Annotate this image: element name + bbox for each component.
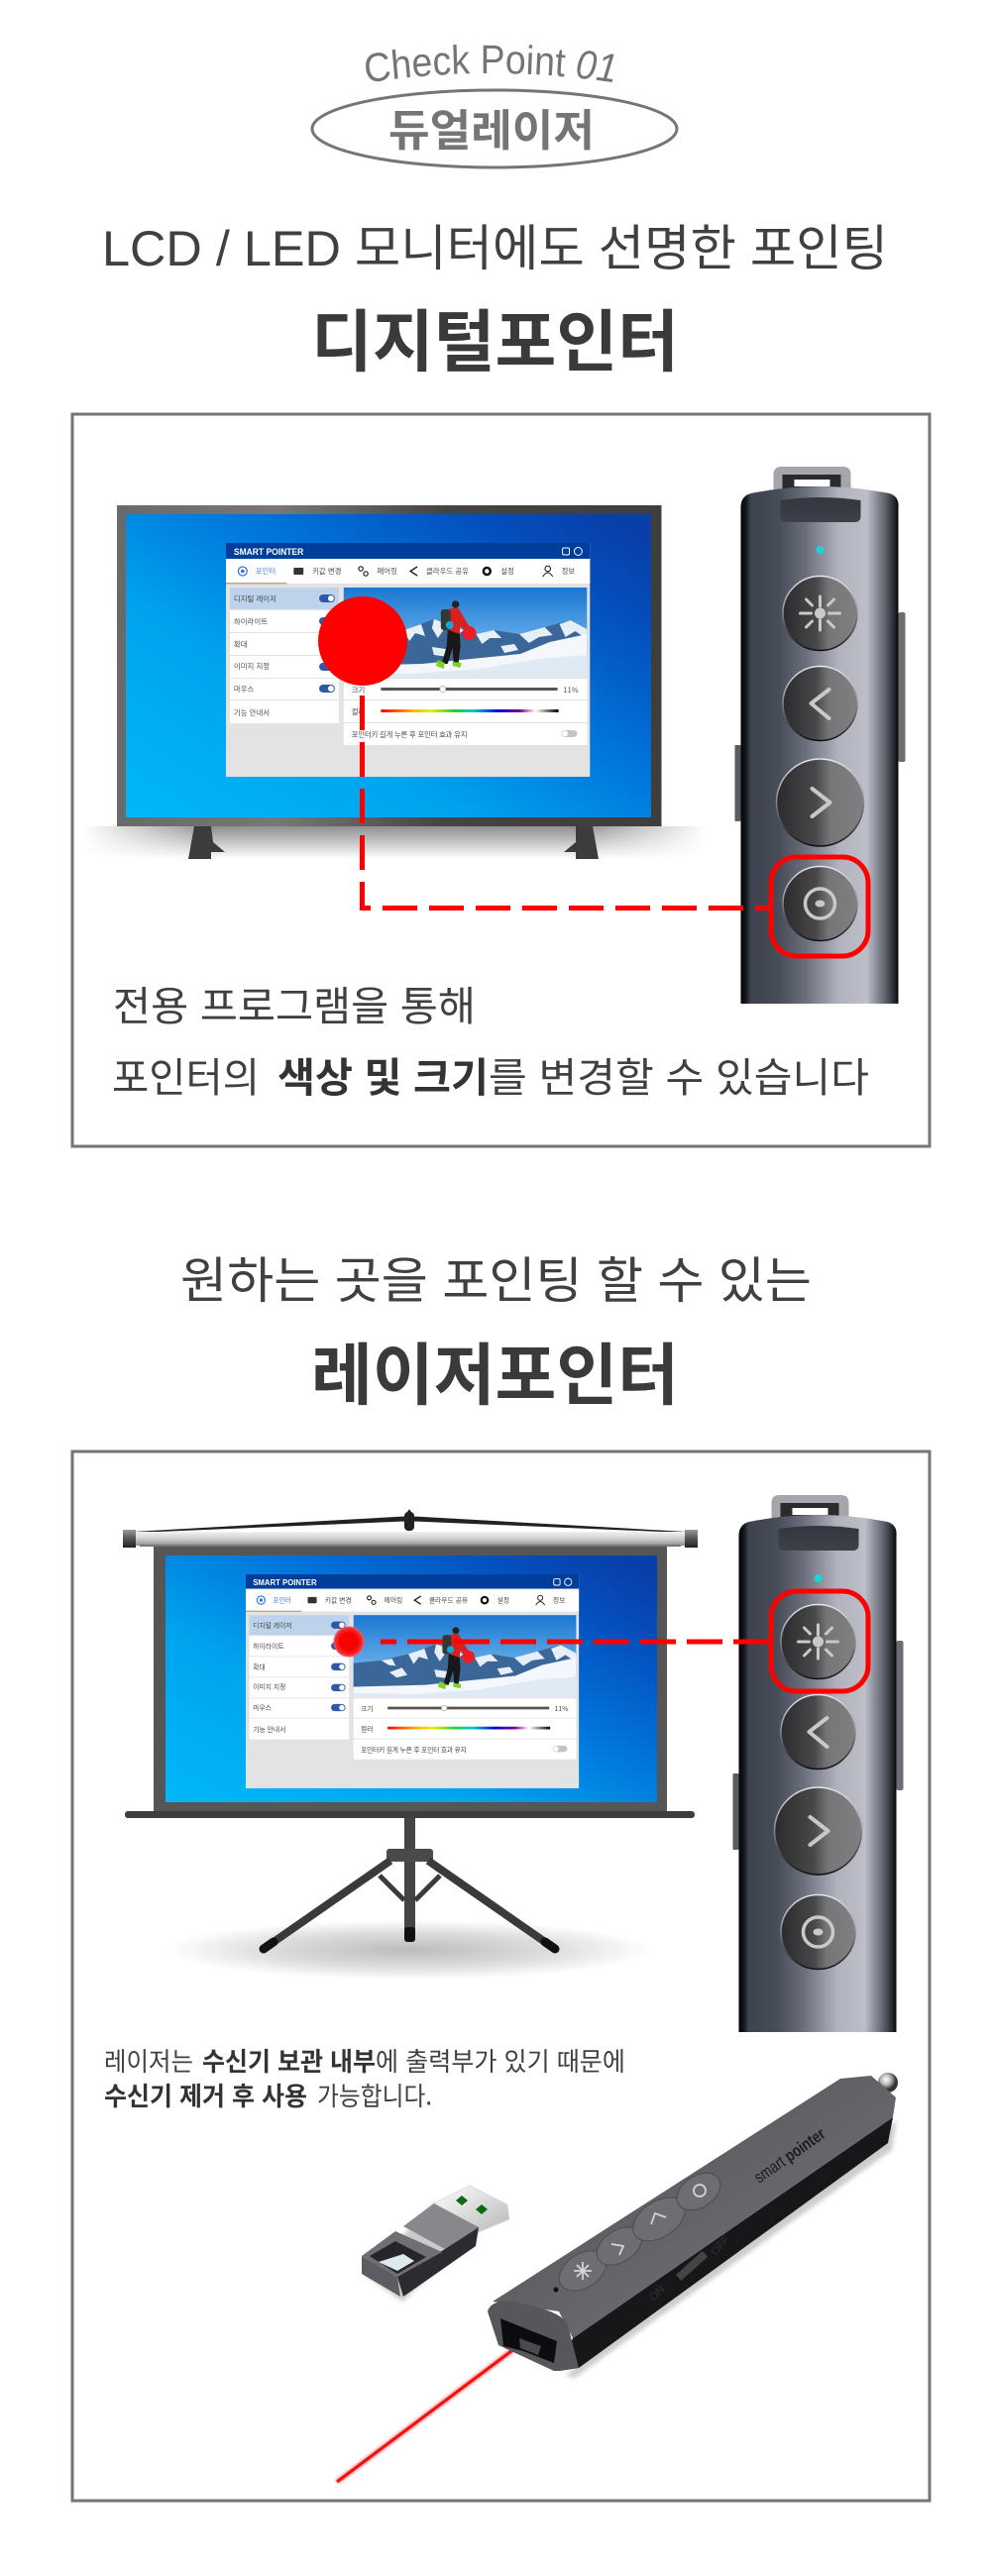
side switches: [735, 612, 906, 821]
software window: 디지털 레이저: [234, 593, 276, 604]
USB receiver: [362, 2186, 509, 2302]
side switches: [733, 1641, 904, 1850]
software window on screen: 클라우드 공유: [429, 1594, 468, 1604]
software window: 이미지 지정: [234, 661, 270, 672]
button: previous: [783, 666, 857, 741]
software window on screen: 기능 안내서: [253, 1724, 285, 1734]
software window: 하이라이트: [234, 616, 268, 627]
software window on screen: 마우스: [253, 1702, 272, 1712]
pen buttons: [552, 2166, 727, 2299]
dashed connector line: [363, 696, 769, 908]
software window: 11%: [564, 685, 579, 696]
dashed connector line: [381, 1639, 769, 1645]
panel: laser pointer: [72, 1451, 930, 2501]
panel: digital pointer: [72, 414, 930, 1146]
software window: SMART POINTER: [234, 547, 303, 558]
software window on screen: [246, 1574, 579, 1788]
device clip: [773, 467, 850, 489]
badge: dual laser: 듀얼레이저: [388, 95, 595, 159]
pen button icons: [574, 2185, 706, 2280]
button: previous: [781, 1694, 855, 1770]
software window: [226, 543, 590, 777]
description text: 수신기 보관 내부: [202, 2042, 376, 2079]
software window on screen: 이미지 지정: [253, 1681, 285, 1691]
software window: 크기: [352, 685, 365, 696]
description text: [112, 973, 869, 1104]
laser beam: [337, 2336, 531, 2482]
software window on screen: 11%: [555, 1703, 568, 1713]
pen switch labels: OFF: [709, 2233, 732, 2258]
heading: point anywhere: 원하는 곳을 포인팅 할 수 있는: [180, 1241, 812, 1313]
pen switch labels: [647, 2233, 732, 2304]
software window: 페어링: [377, 566, 397, 577]
description text: 가능합니다.: [317, 2077, 432, 2113]
button: laser: [783, 577, 857, 650]
software window: 포인터키 길게 누른 후 포인터 효과 유지: [352, 729, 468, 740]
check point label: Check Point 01: [366, 45, 614, 82]
software window on screen: 포인터키 길게 누른 후 포인터 효과 유지: [361, 1744, 467, 1754]
heading: LCD LED monitor: LCD / LED 모니터에도 선명한 포인팅: [102, 221, 888, 276]
heading: digital pointer: 디지털포인터: [311, 287, 679, 385]
description text: 포인터의: [112, 1044, 260, 1104]
button: pointer: [781, 1894, 855, 1970]
software window: 키값 변경: [312, 566, 341, 577]
presenter device: [735, 467, 906, 1004]
software window: 컬러: [352, 706, 365, 717]
software window on screen: 설정: [497, 1594, 509, 1604]
description text: 색상 및 크기: [277, 1044, 489, 1104]
software window on screen: 키값 변경: [325, 1594, 352, 1604]
badge: dual laser: [312, 90, 677, 167]
software window on screen: 하이라이트: [253, 1641, 283, 1651]
software window: 정보: [562, 566, 575, 577]
software window: 설정: [500, 566, 514, 577]
software window: 클라우드 공유: [426, 566, 469, 577]
software window on screen: 크기: [361, 1703, 373, 1713]
presenter product shot: [488, 2073, 898, 2378]
description text: 수신기 제거 후 사용: [104, 2077, 307, 2113]
software window: 확대: [234, 639, 248, 650]
software window on screen: SMART POINTER: [253, 1577, 317, 1587]
description text: 레이저는: [104, 2042, 193, 2079]
description text: 를 변경할 수 있습니다: [489, 1044, 869, 1104]
button: next: [777, 759, 864, 846]
software window on screen: 컬러: [361, 1723, 373, 1733]
button: next: [775, 1787, 862, 1875]
red laser dot: [333, 1627, 365, 1657]
presenter device: [733, 1495, 904, 2032]
projector screen illustration: [123, 1510, 698, 1980]
red highlight around laser button: [771, 1591, 868, 1691]
description text: 에 출력부가 있기 때문에: [376, 2042, 625, 2079]
monitor illustration: [83, 505, 706, 859]
description text: [104, 2042, 625, 2113]
pen branding: smart pointer: [750, 2124, 829, 2187]
red digital pointer circle: [318, 596, 407, 686]
device clip: [771, 1495, 848, 1518]
heading: laser pointer: 레이저포인터: [311, 1321, 679, 1419]
software window on screen: 페어링: [385, 1594, 402, 1604]
red highlight around pointer button: [771, 857, 868, 956]
software window on screen: 확대: [253, 1662, 266, 1671]
software window: 포인터: [256, 566, 275, 577]
description text: 전용 프로그램을 통해: [113, 973, 476, 1032]
indicator LED: [817, 546, 825, 554]
pen switch labels: ON: [647, 2284, 667, 2304]
button: laser: [781, 1605, 855, 1678]
software window: 마우스: [234, 684, 255, 695]
button: pointer: [783, 866, 857, 941]
indicator LED: [815, 1574, 823, 1582]
software window: 기능 안내서: [234, 707, 270, 718]
software window on screen: 정보: [553, 1594, 565, 1604]
software window on screen: 디지털 레이저: [253, 1620, 292, 1630]
software window on screen: 포인터: [273, 1594, 291, 1604]
